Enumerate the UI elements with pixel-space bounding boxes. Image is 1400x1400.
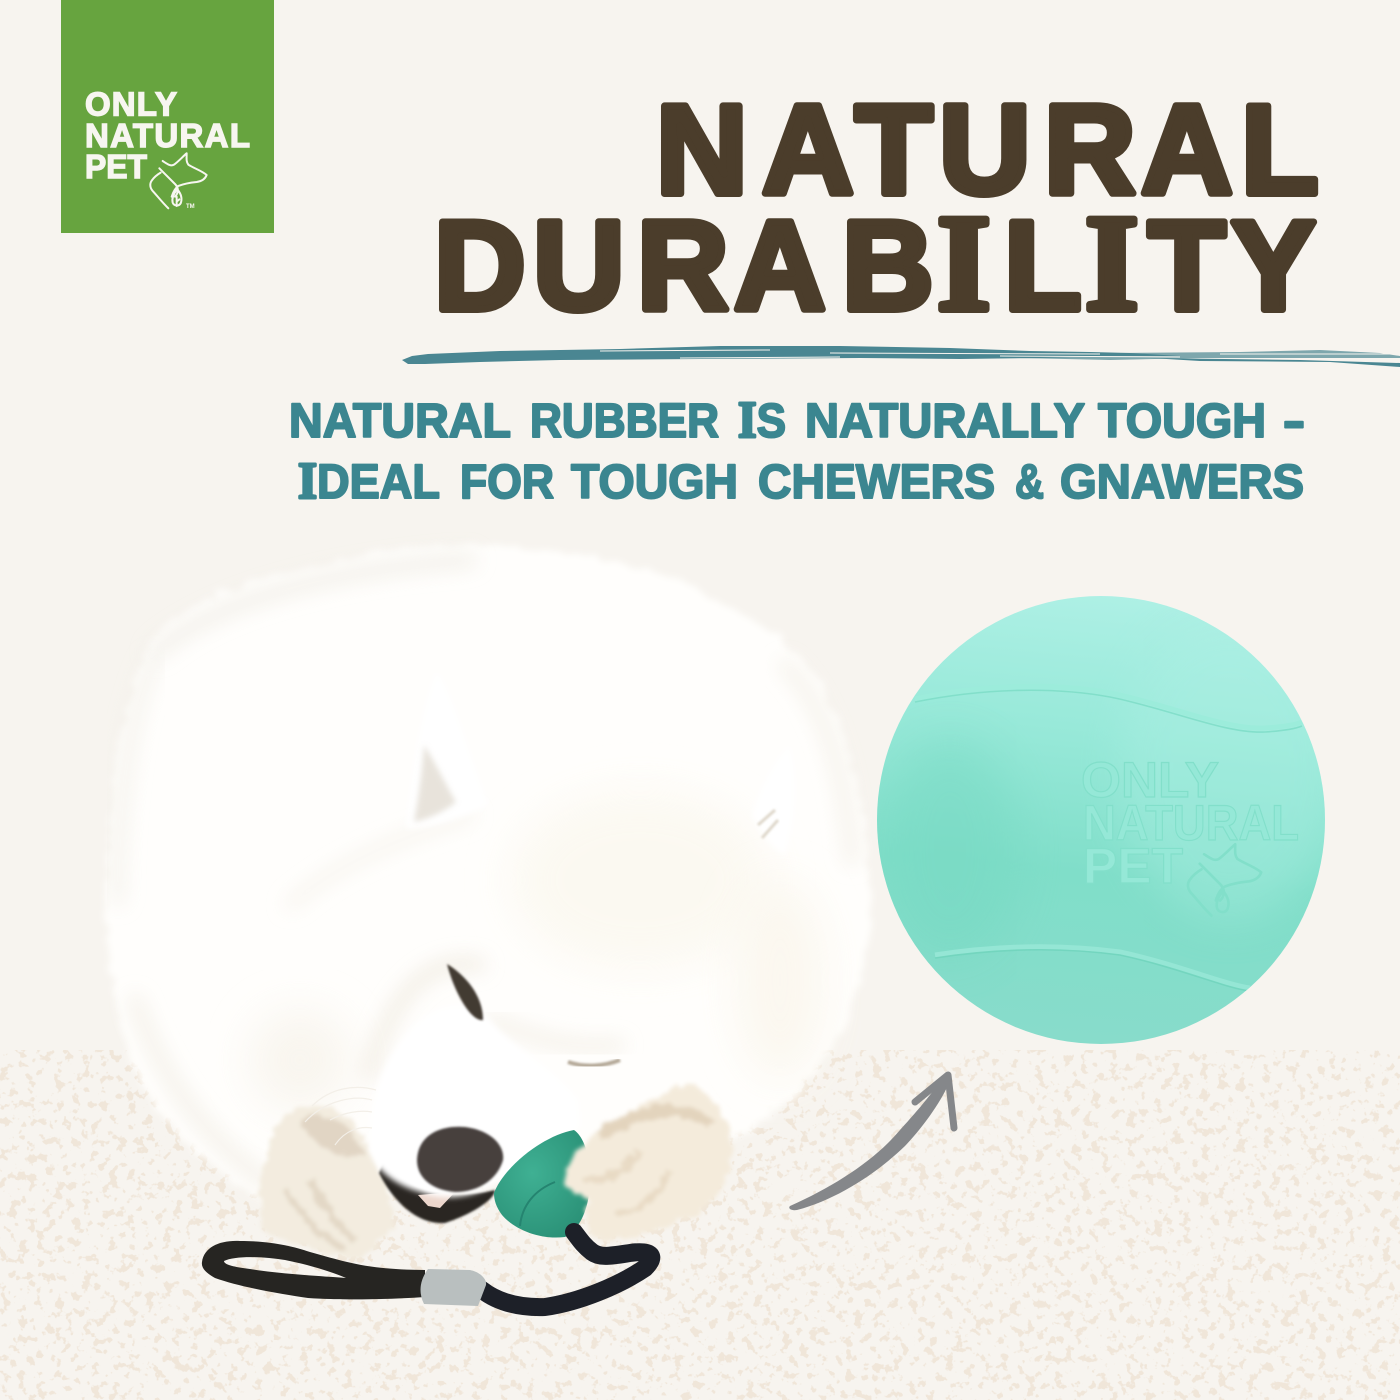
- logo panel: [61, 0, 274, 233]
- logo trademark: TM: [186, 204, 195, 210]
- dog muzzle: [369, 1006, 580, 1197]
- dog body: [106, 546, 870, 1205]
- large teal ball: [877, 596, 1340, 1044]
- dog mouth: [379, 1160, 495, 1223]
- title: DURABILITY: [434, 186, 1316, 340]
- right paw: [565, 1083, 732, 1240]
- logo wordmark: ONLY: [85, 86, 177, 122]
- subtitle: NATURALLY: [805, 395, 1085, 448]
- embossed ball logo: [1081, 752, 1299, 894]
- ball seams: [915, 686, 1302, 991]
- subtitle: &: [1015, 456, 1044, 509]
- embossed ball logo: PET: [1083, 838, 1183, 894]
- logo wordmark: [85, 86, 250, 185]
- rope clip: [421, 1269, 486, 1306]
- title: [434, 78, 1319, 340]
- ball shading: [885, 690, 1324, 991]
- rope toy: [202, 1232, 651, 1307]
- subtitle: TOUGH: [571, 456, 738, 509]
- embossed ball logo: NATURAL: [1083, 795, 1299, 851]
- logo wordmark: PET: [85, 148, 147, 185]
- small teal ball: [494, 1130, 590, 1238]
- subtitle: TOUGH: [1098, 395, 1266, 448]
- subtitle: RUBBER: [530, 395, 719, 448]
- whiskers: [305, 1087, 376, 1145]
- subtitle: FOR: [460, 456, 554, 509]
- dog nose: [417, 1127, 503, 1192]
- second eye: [568, 1060, 620, 1066]
- speckled floor texture: [0, 1050, 1400, 1400]
- tongue: [418, 1192, 455, 1208]
- subtitle: [289, 392, 1305, 510]
- logo pet icon: [150, 153, 207, 208]
- logo wordmark: NATURAL: [85, 117, 250, 154]
- arrow pointing to ball: [789, 1075, 954, 1210]
- photo: white dog chewing ball: [106, 546, 870, 1307]
- title: NATURAL: [656, 78, 1319, 220]
- subtitle: GNAWERS: [1060, 456, 1304, 509]
- embossed ball icon: [1188, 844, 1261, 916]
- subtitle: CHEWERS: [758, 456, 995, 509]
- dog eye: [447, 964, 483, 1020]
- subtitle: IDEAL: [298, 453, 440, 510]
- subtitle: IS: [738, 392, 786, 449]
- fur shading: [118, 560, 852, 1185]
- left paw: [261, 1105, 394, 1260]
- brush stroke divider: [402, 346, 1400, 367]
- subtitle: NATURAL: [289, 395, 511, 448]
- subtitle: -: [1283, 395, 1305, 448]
- dog ears: [406, 672, 794, 855]
- embossed ball logo: ONLY: [1081, 752, 1219, 808]
